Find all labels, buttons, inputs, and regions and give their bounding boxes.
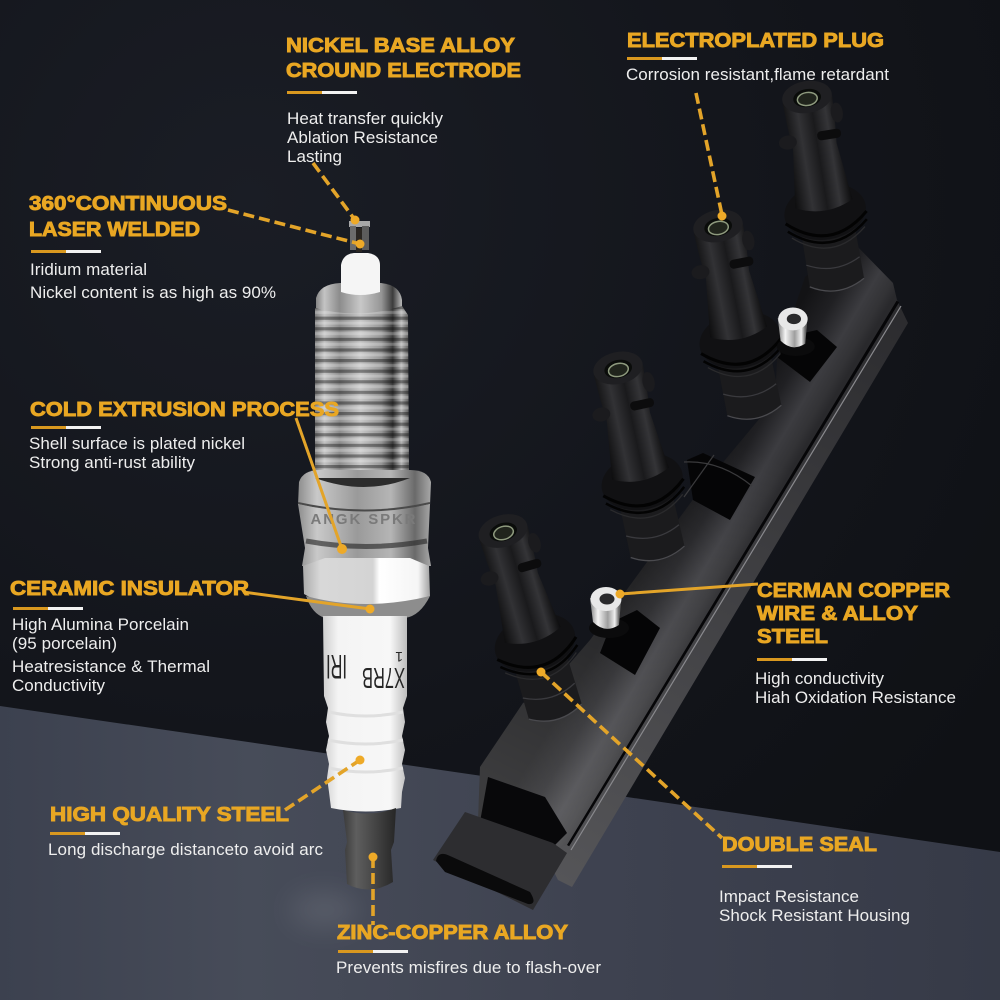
leader: copper wire xyxy=(616,584,758,598)
label: ceramic insulator: Conductivity xyxy=(12,676,106,695)
label: cold extrusion process: Shell surface is plated nickel xyxy=(29,434,245,453)
top shell ring xyxy=(316,283,402,320)
leader: high quality steel xyxy=(285,756,364,810)
shell marking: ANGK SPKR xyxy=(310,511,416,528)
label: ceramic insulator: High Alumina Porcelain xyxy=(12,615,189,634)
bolt 2 xyxy=(777,308,815,356)
label: electroplated plug: ELECTROPLATED PLUG xyxy=(627,30,884,52)
hex nut xyxy=(303,558,430,604)
tower 1 xyxy=(459,504,596,731)
label: zinc-copper alloy xyxy=(336,922,601,977)
label: nickel base alloy: Heat transfer quickly xyxy=(287,109,444,128)
label: ceramic insulator xyxy=(10,578,250,695)
label: double seal: Impact Resistance xyxy=(719,887,859,906)
label: german copper wire and alloy steel: High conductivity xyxy=(755,669,884,688)
label: nickel base alloy: CROUND ELECTRODE xyxy=(286,60,521,82)
housing light band xyxy=(478,242,897,850)
ceramic insulator xyxy=(323,616,407,812)
label: 360 continuous laser welded: Iridium material xyxy=(30,260,147,279)
insulator nose xyxy=(341,253,380,295)
label: german copper wire and alloy steel: STEEL xyxy=(757,626,828,648)
insulator print: 1 xyxy=(395,649,403,665)
label: nickel base alloy xyxy=(286,35,521,166)
label: nickel base alloy: NICKEL BASE ALLOY xyxy=(286,35,516,57)
label: german copper wire and alloy steel: Hiah Oxidation Resistance xyxy=(755,688,956,707)
leader: nickel base alloy xyxy=(313,163,360,224)
spark plug: IRI xyxy=(326,647,347,685)
shell body xyxy=(298,504,431,566)
connector xyxy=(433,812,567,910)
windows xyxy=(600,330,837,675)
insulator print: X7RB xyxy=(362,661,405,693)
label: cold extrusion process xyxy=(29,399,339,472)
tower 2 xyxy=(575,344,699,568)
tower 3 xyxy=(675,202,796,426)
label: electroplated plug: Corrosion resistant,flame retardant xyxy=(626,65,889,84)
label: high quality steel: Long discharge distanceto avoid arc xyxy=(48,840,324,859)
leader: electroplated xyxy=(696,93,726,220)
insulator print xyxy=(326,647,405,693)
label: electroplated plug xyxy=(626,30,889,84)
smoke haze xyxy=(291,892,359,928)
label: german copper wire and alloy steel xyxy=(755,580,956,707)
flange xyxy=(306,596,430,618)
leader: double seal xyxy=(536,668,722,838)
washer xyxy=(298,470,431,512)
label: ceramic insulator: CERAMIC INSULATOR xyxy=(10,578,250,600)
leader: 360 weld xyxy=(228,210,364,248)
label: 360 continuous laser welded: Nickel content is as high as 90% xyxy=(30,283,276,302)
label: high quality steel: HIGH QUALITY STEEL xyxy=(50,804,289,826)
coil housing xyxy=(478,242,897,850)
threads xyxy=(315,306,409,475)
label: cold extrusion process: Strong anti-rust ability xyxy=(29,453,196,472)
label: double seal: DOUBLE SEAL xyxy=(722,834,877,856)
label: zinc-copper alloy: Prevents misfires due to flash-over xyxy=(336,958,601,977)
floor band xyxy=(0,706,1000,1000)
label: double seal xyxy=(719,834,910,925)
label: german copper wire and alloy steel: CERMAN COPPER xyxy=(757,580,951,602)
plug housing opening xyxy=(480,777,567,845)
tower 4 xyxy=(764,75,878,297)
label: nickel base alloy: Lasting xyxy=(287,147,342,166)
label: 360 continuous laser welded xyxy=(29,193,276,302)
bolt 1 xyxy=(589,587,629,638)
ignition coil xyxy=(433,75,908,910)
label: ceramic insulator: Heatresistance & Thermal xyxy=(12,657,210,676)
label: german copper wire and alloy steel: WIRE & ALLOY xyxy=(757,603,919,625)
label: high quality steel xyxy=(48,804,324,859)
leader: ceramic insulator xyxy=(243,592,374,614)
leader: cold extrusion xyxy=(296,418,347,554)
label: zinc-copper alloy: ZINC-COPPER ALLOY xyxy=(337,922,569,944)
label: 360 continuous laser welded: 360°CONTINUOUS xyxy=(29,193,227,215)
terminal xyxy=(343,808,396,890)
label: nickel base alloy: Ablation Resistance xyxy=(287,128,438,147)
ground electrode xyxy=(349,221,370,252)
leader: zinc copper xyxy=(368,852,378,925)
label: 360 continuous laser welded: LASER WELDED xyxy=(29,219,200,241)
rail xyxy=(549,300,908,887)
label: ceramic insulator: (95 porcelain) xyxy=(12,634,117,653)
spark plug xyxy=(298,221,431,890)
label: cold extrusion process: COLD EXTRUSION PROCESS xyxy=(30,399,339,421)
label: double seal: Shock Resistant Housing xyxy=(719,906,910,925)
